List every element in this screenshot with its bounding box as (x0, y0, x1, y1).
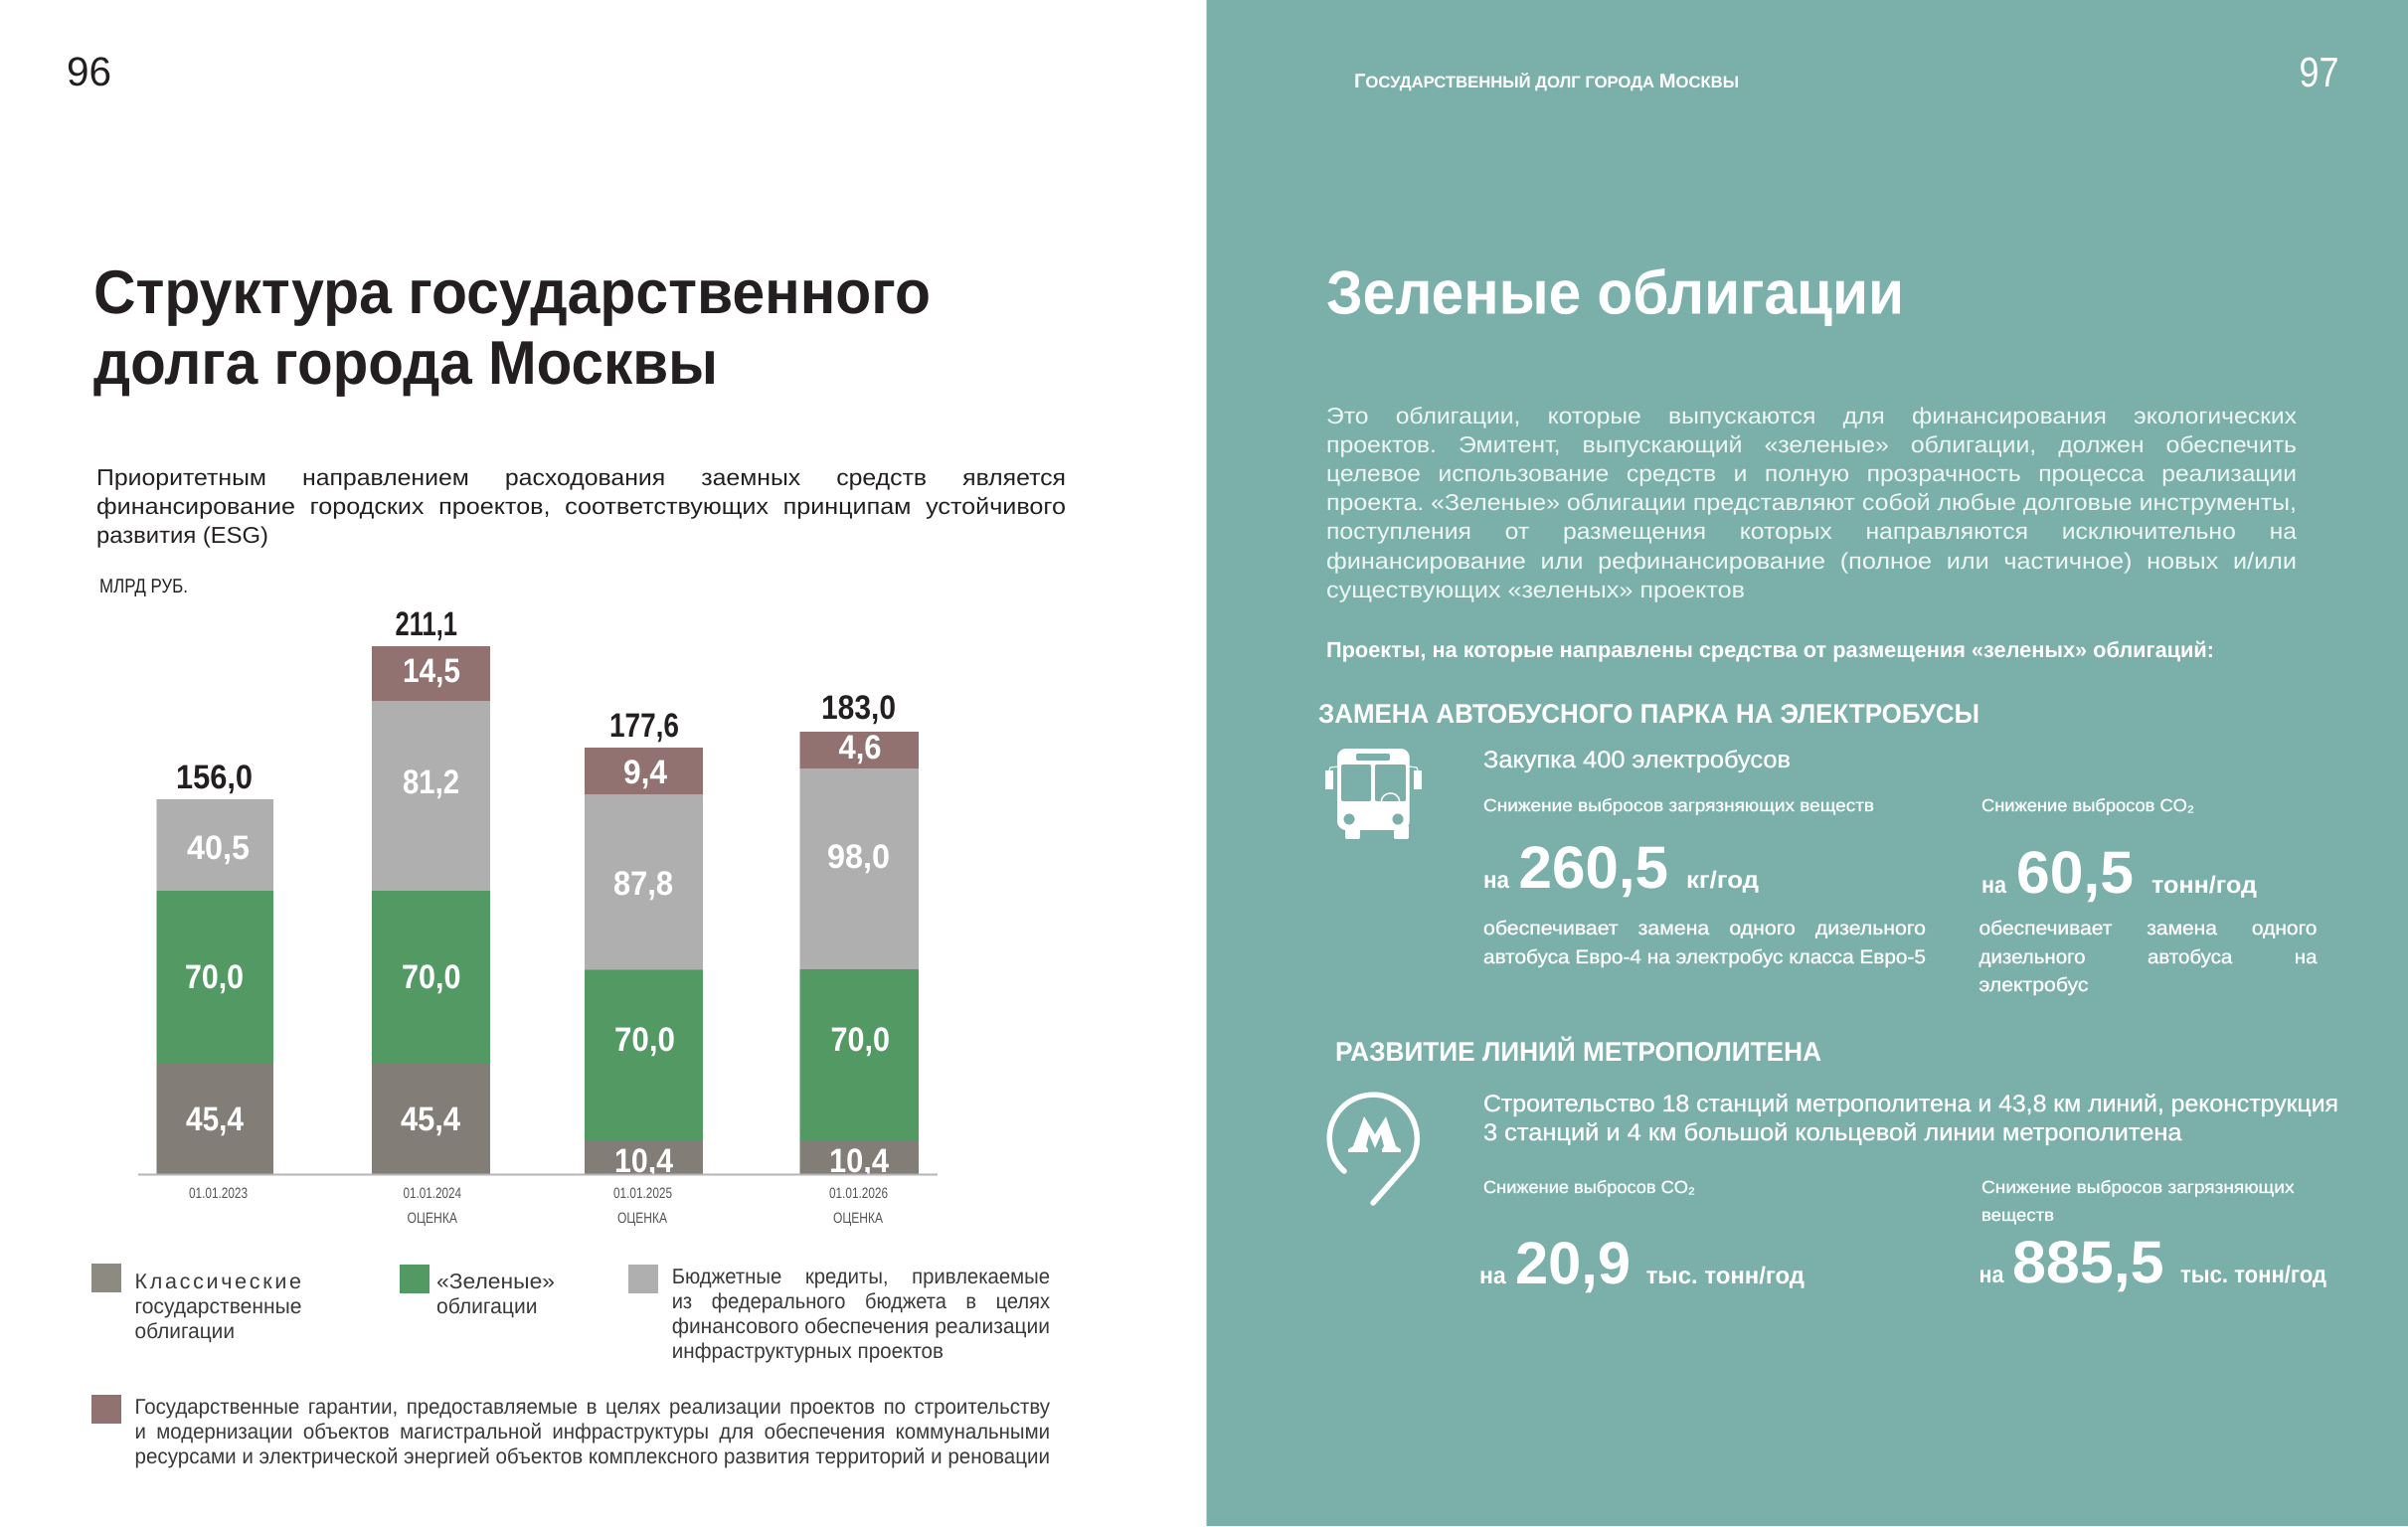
metric: CO2: дизельного автобуса на (1978, 946, 2318, 968)
icon: bus (1325, 749, 1422, 839)
x axis labels: 01.01.2026 (829, 1185, 888, 1202)
metric: CO2 (1479, 1177, 1805, 1296)
legend: state guarantees: Государственные гарантии, предоставляемые в целях реализации проектов по строительству (135, 1395, 1050, 1419)
bar 01.01.2026 (799, 689, 919, 1180)
bar 01.01.2025: 177,6 (609, 707, 679, 745)
definition paragraph: проектов. Эмитент, выпускающий «зеленые» облигации, должен обеспечить (1326, 431, 2297, 457)
construction note: Строительство 18 станций метрополитена и 43,8 км линий, реконструкция (1483, 1091, 2338, 1117)
metric: pollutants: Снижение выбросов загрязняющих (1981, 1177, 2295, 1197)
bar 01.01.2024 (372, 605, 490, 1174)
metric: pollutants: Снижение выбросов загрязняющих веществ (1483, 795, 1874, 815)
metric: pollutants (1978, 1177, 2326, 1295)
section heading: ЗАМЕНА АВТОБУСНОГО ПАРКА НА ЭЛЕКТРОБУСЫ (1318, 699, 1979, 729)
definition paragraph: поступления от размещения которых направляются исключительно на (1326, 518, 2297, 544)
title: green bonds: Зеленые облигации (1326, 258, 1904, 328)
bar 01.01.2026: 10,4 (829, 1142, 889, 1180)
metric: CO2: на (1981, 872, 2007, 899)
legend: state guarantees: ресурсами и электрической энергией объектов комплексного развития территорий и реновации (135, 1444, 1050, 1468)
legend: green bonds: облигации (436, 1294, 537, 1318)
projects subheading: Проекты, на которые направлены средства от размещения «зеленых» облигаций: (1326, 637, 2214, 662)
legend: green bonds (400, 1265, 555, 1318)
metric: pollutants: автобуса Евро-4 на электробус класса Евро-5 (1483, 946, 1926, 968)
construction note (1483, 1091, 2338, 1146)
page number 97: 97 (2299, 49, 2338, 95)
bar 01.01.2025: 70,0 (614, 1021, 675, 1059)
metric: CO2: на (1479, 1263, 1506, 1289)
x axis labels: ОЦЕНКА (833, 1210, 883, 1227)
bar 01.01.2026: 183,0 (821, 689, 896, 727)
metric: pollutants: 885,5 (2012, 1229, 2164, 1295)
metric: pollutants: тыс. тонн/год (2180, 1262, 2326, 1288)
x axis labels: ОЦЕНКА (408, 1210, 457, 1227)
bar 01.01.2025: 9,4 (623, 754, 667, 791)
metric: CO2: 60,5 (2016, 839, 2134, 906)
definition paragraph: проекта. «Зеленые» облигации представляют собой любые долговые инструменты, (1326, 489, 2297, 515)
legend: state guarantees (91, 1395, 1050, 1468)
metric: CO2: обеспечивает замена одного (1978, 918, 2318, 939)
bar 01.01.2023: 70,0 (185, 958, 244, 996)
legend: budget loans: финансового обеспечения реализации (672, 1314, 1050, 1338)
legend: classic bonds: облигации (135, 1319, 235, 1343)
legend: state guarantees: и модернизации объектов магистральной инфраструктуры для обеспечения коммунальными (135, 1420, 1050, 1443)
metric: pollutants: на (1978, 1262, 2004, 1288)
unit label: МЛРД РУБ. (99, 576, 188, 597)
legend: budget loans: Бюджетные кредиты, привлекаемые (672, 1265, 1050, 1288)
legend: budget loans: инфраструктурных проектов (672, 1339, 944, 1363)
bar 01.01.2023: 45,4 (186, 1101, 244, 1138)
legend: classic bonds (91, 1264, 302, 1343)
metric: CO2: Снижение выбросов CO₂ (1981, 795, 2194, 815)
icon: metro pin (1329, 1095, 1417, 1203)
section heading: РАЗВИТИЕ ЛИНИЙ МЕТРОПОЛИТЕНА (1335, 1036, 1821, 1067)
legend: budget loans: из федерального бюджета в целях (672, 1289, 1050, 1313)
metric: CO2: Снижение выбросов CO₂ (1483, 1177, 1695, 1197)
page number 96: 96 (67, 49, 111, 94)
bar 01.01.2026: 98,0 (827, 838, 890, 876)
intro paragraph: Приоритетным направлением расходования заемных средств является (96, 464, 1066, 490)
bar 01.01.2025 (585, 707, 703, 1180)
panel: left page (67, 49, 1066, 1468)
stacked bar chart (138, 605, 938, 1227)
bar 01.01.2024: 14,5 (403, 652, 460, 690)
metric: pollutants: на (1483, 867, 1510, 894)
purchase note: Закупка 400 электробусов (1483, 747, 1791, 773)
bar 01.01.2025: 87,8 (613, 865, 673, 903)
x axis labels (189, 1185, 888, 1227)
x axis labels: 01.01.2025 (613, 1185, 672, 1202)
bar 01.01.2024: 70,0 (402, 958, 461, 996)
definition paragraph (1326, 403, 2298, 602)
section: electric buses (1318, 699, 2318, 996)
metric: CO2 (1978, 795, 2318, 996)
x axis labels: 01.01.2023 (189, 1185, 248, 1202)
panel: right page, green bonds (1207, 0, 2408, 1526)
bar 01.01.2024: 211,1 (396, 605, 457, 643)
title: debt structure: Структура государственного (93, 258, 931, 327)
section: metro lines (1329, 1036, 2338, 1296)
running header: ГОСУДАРСТВЕННЫЙ ДОЛГ ГОРОДА МОСКВЫ (1354, 71, 1739, 92)
bar 01.01.2026: 4,6 (839, 729, 881, 766)
metric: CO2: тыс. тонн/год (1646, 1263, 1805, 1289)
construction note: 3 станций и 4 км большой кольцевой линии метрополитена (1483, 1119, 2182, 1146)
intro paragraph: развития (ESG) (96, 522, 268, 548)
legend: classic bonds: Классические (135, 1270, 301, 1293)
metric: pollutants: обеспечивает замена одного дизельного (1483, 918, 1926, 939)
x axis labels: 01.01.2024 (404, 1185, 461, 1202)
metric: CO2: тонн/год (2151, 872, 2257, 899)
metric: pollutants: кг/год (1686, 867, 1759, 894)
title: debt structure (93, 258, 931, 398)
metric: pollutants (1483, 795, 1926, 968)
bar 01.01.2024: 81,2 (403, 764, 459, 801)
legend: green bonds: «Зеленые» (436, 1270, 555, 1293)
intro paragraph: финансирование городских проектов, соответствующих принципам устойчивого (96, 493, 1066, 519)
x axis labels: ОЦЕНКА (617, 1210, 667, 1227)
legend: budget loans (628, 1265, 1050, 1363)
definition paragraph: Это облигации, которые выпускаются для финансирования экологических (1326, 403, 2298, 428)
metric: pollutants: веществ (1981, 1205, 2054, 1225)
definition paragraph: целевое использование средств и полную прозрачность процесса реализации (1326, 460, 2297, 486)
legend (91, 1264, 1050, 1468)
bar 01.01.2026: 70,0 (831, 1021, 890, 1059)
bar 01.01.2023: 40,5 (187, 829, 250, 867)
bar 01.01.2024: 45,4 (401, 1101, 460, 1138)
metric: CO2: 20,9 (1515, 1230, 1631, 1296)
intro paragraph (96, 464, 1066, 548)
metric: CO2: электробус (1978, 974, 2089, 996)
metric: pollutants: 260,5 (1519, 834, 1668, 901)
bar 01.01.2025: 10,4 (614, 1142, 673, 1180)
definition paragraph: существующих «зеленых» проектов (1326, 577, 1745, 602)
title: debt structure: долга города Москвы (93, 329, 718, 398)
definition paragraph: финансирование или рефинансирование (полное или частичное) новых и/или (1326, 548, 2297, 574)
bar 01.01.2023: 156,0 (176, 759, 253, 796)
bar 01.01.2023 (157, 759, 273, 1174)
legend: classic bonds: государственные (135, 1294, 302, 1318)
